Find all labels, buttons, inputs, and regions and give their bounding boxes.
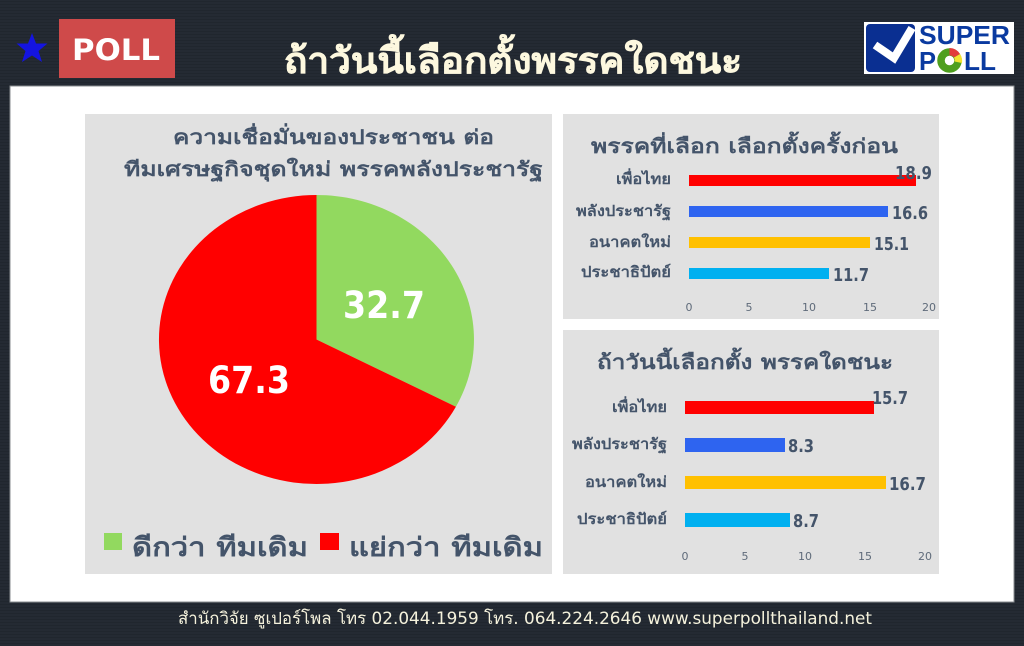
bars: current election: 8.7 (793, 512, 819, 532)
bars: previous election: เพื่อไทย (616, 168, 671, 188)
badge: POLL: POLL (72, 33, 160, 67)
panel: current election bar chart (563, 330, 939, 574)
axis: previous election (686, 301, 936, 314)
bars: previous election: อนาคตใหม่ (589, 233, 671, 251)
axis: current election: 10 (798, 550, 812, 563)
heading: pie chart title: ความเชื่อมั่นของประชาชน ต่อ (173, 122, 494, 149)
title: ถ้าวันนี้เลือกตั้งพรรคใดชนะ (284, 34, 742, 82)
bars: current election: เพื่อไทย (612, 396, 667, 416)
bars: current election: 8.3 (788, 437, 814, 457)
icon: blue star (16, 33, 48, 62)
heading: pie chart title: ทีมเศรษฐกิจชุดใหม่ พรรคพลังประชารัฐ (124, 157, 543, 183)
axis: current election: 0 (682, 550, 688, 563)
bars: previous election: 11.7 (833, 266, 869, 286)
bars: previous election: 16.6 (892, 204, 928, 224)
bars: current election: 15.7 (872, 389, 908, 409)
axis: previous election: 20 (922, 301, 936, 314)
footer contact line: สำนักวิจัย ซูเปอร์โพล โทร 02.044.1959 โทร. 064.224.2646 www.superpollthailand.net (178, 608, 872, 629)
pie chart: 67.3 (208, 359, 290, 402)
axis: previous election: 10 (802, 301, 816, 314)
badge: POLL (59, 19, 175, 78)
bars: current election: 16.7 (889, 475, 926, 495)
panel: confidence pie chart (85, 114, 552, 574)
axis: previous election: 0 (686, 301, 692, 314)
axis: current election: 5 (742, 550, 748, 563)
white content area (10, 86, 1014, 602)
bars: previous election: ประชาธิปัตย์ (581, 263, 671, 281)
bars: previous election (576, 164, 932, 286)
logo: Super Poll: SUPER (919, 20, 1010, 50)
axis: current election: 15 (858, 550, 872, 563)
bars: previous election: 15.1 (874, 235, 909, 255)
logo: Super Poll: P (919, 46, 936, 76)
legend: แย่กว่า ทีมเดิม (349, 533, 543, 563)
bars: previous election: 18.9 (895, 164, 932, 184)
pie chart (159, 195, 474, 484)
heading: pie chart title (124, 122, 543, 183)
heading: current election: ถ้าวันนี้เลือกตั้ง พรรคใดชนะ (597, 347, 893, 374)
axis: current election: 20 (918, 550, 932, 563)
bars: current election: ประชาธิปัตย์ (577, 510, 667, 528)
axis: previous election: 5 (746, 301, 752, 314)
logo: Super Poll (864, 20, 1014, 76)
axis: current election (682, 550, 932, 563)
legend (104, 533, 543, 563)
legend: ดีกว่า ทีมเดิม (132, 533, 308, 563)
bars: current election: พลังประชารัฐ (572, 435, 667, 454)
axis: previous election: 15 (863, 301, 877, 314)
heading: previous election: พรรคที่เลือก เลือกตั้งครั้งก่อน (591, 131, 898, 158)
logo: Super Poll: LL (964, 46, 996, 76)
pie chart: 32.7 (343, 284, 425, 327)
panel: previous election bar chart (563, 114, 939, 319)
bars: previous election: พลังประชารัฐ (576, 202, 671, 221)
bars: current election: อนาคตใหม่ (585, 473, 667, 491)
bars: current election (572, 389, 926, 532)
